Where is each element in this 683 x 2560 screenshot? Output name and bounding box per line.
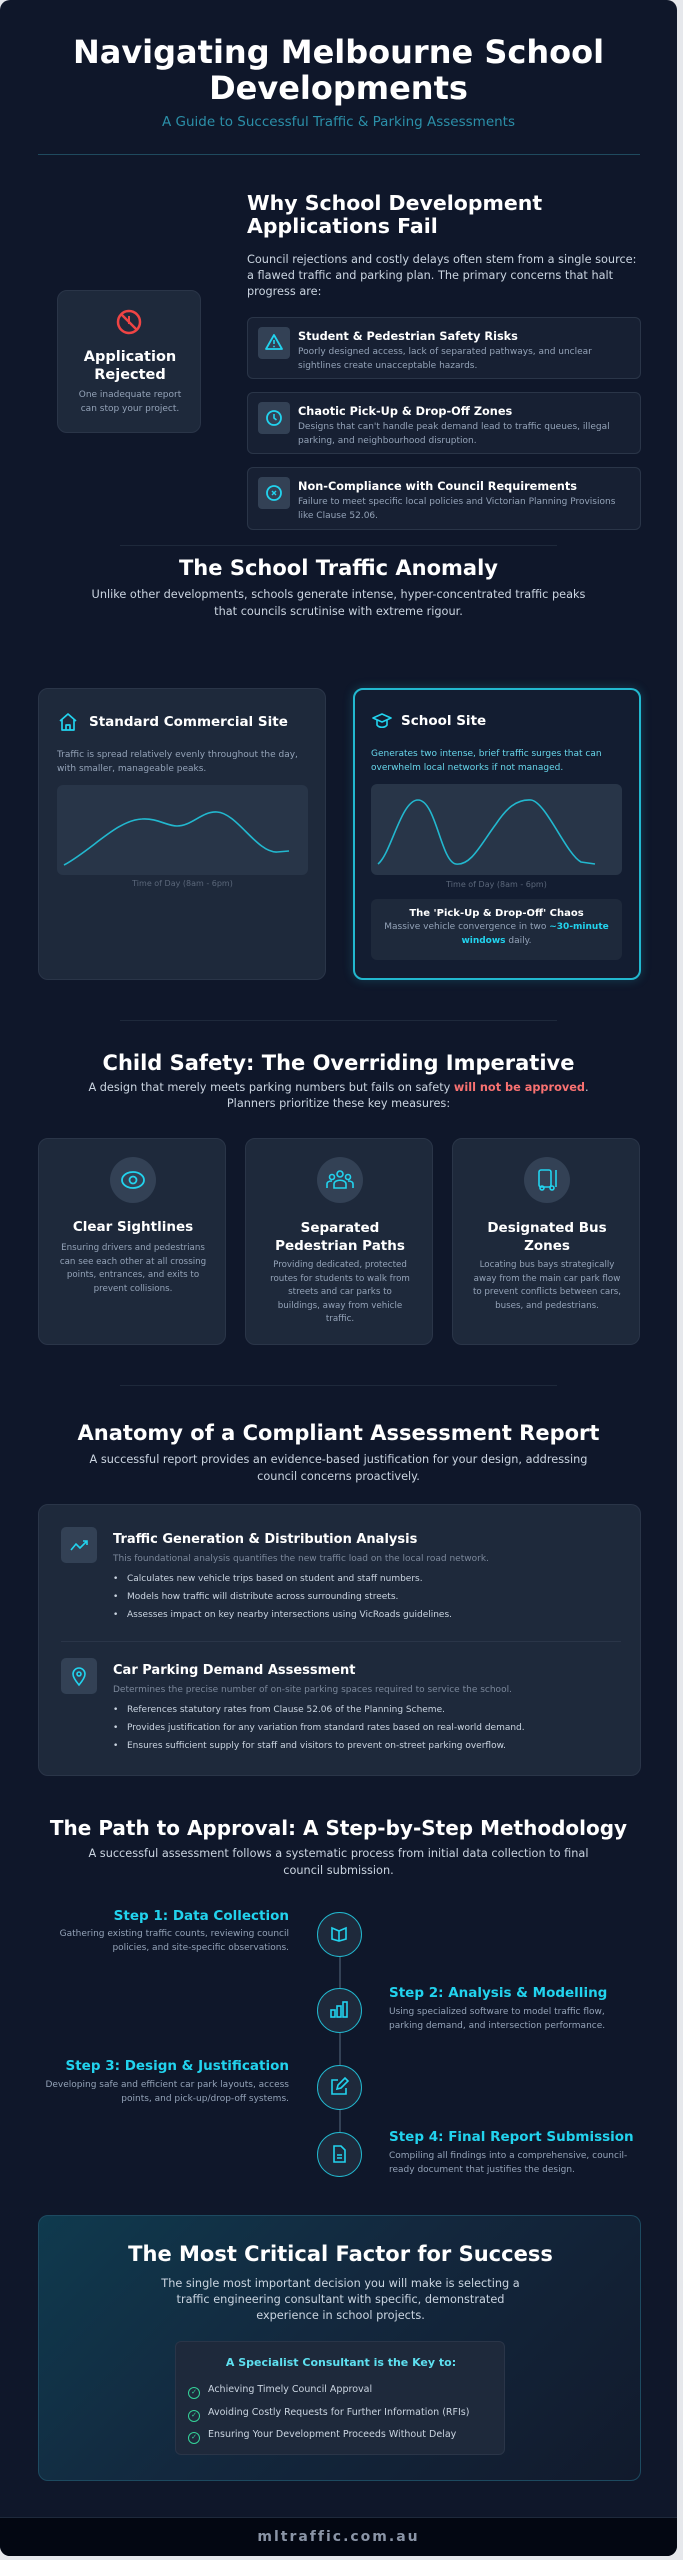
card: clear sightlines: Ensuring drivers and pedestrians can see each other at all crossing points, entrances, and exits to prevent collisions. xyxy=(60,1243,206,1294)
text: anomaly intro: Unlike other developments, schools generate intense, hyper-concentrated traffic peaks that councils scrutinise with extreme rigour. xyxy=(92,588,585,618)
callout: specialist consultant: ✓ xyxy=(191,2433,197,2441)
item: parking demand: References statutory rates from Clause 52.06 of the Planning Scheme. xyxy=(127,1705,445,1715)
chart: even traffic xyxy=(57,785,308,875)
panel: application rejected: can stop your project. xyxy=(81,404,179,414)
item: traffic generation: Models how traffic will distribute across surrounding streets. xyxy=(127,1592,398,1602)
item: parking demand: Ensures sufficient supply for staff and visitors to prevent on-street parking overflow. xyxy=(127,1741,506,1751)
item: traffic generation: Calculates new vehicle trips based on student and staff numbers. xyxy=(127,1574,423,1584)
callout: specialist consultant: Ensuring Your Development Proceeds Without Delay xyxy=(208,2429,456,2440)
item: parking demand: Determines the precise number of on-site parking spaces required to service the school. xyxy=(113,1685,512,1695)
icon: prohibited xyxy=(116,310,142,334)
item: traffic generation: Traffic Generation & Distribution Analysis xyxy=(113,1532,417,1547)
panel: school site: Generates two intense, brief traffic surges that can overwhelm local networks if not managed. xyxy=(371,749,602,772)
chart: twin peaks xyxy=(371,784,622,875)
card: non-compliance xyxy=(247,467,641,530)
step 1: Gathering existing traffic counts, reviewing council policies, and site-specific observations. xyxy=(60,1929,289,1952)
title xyxy=(73,33,604,107)
card: pickup zones: Designs that can't handle peak demand lead to traffic queues, illegal parking, and neighbourhood disruption. xyxy=(298,422,610,446)
card: separated paths: Pedestrian Paths xyxy=(275,1238,405,1254)
card: bus zones: Designated Bus xyxy=(487,1220,607,1236)
text: safety intro: Planners prioritize these key measures: xyxy=(227,1097,450,1110)
footer xyxy=(0,2517,677,2556)
item: traffic generation: This foundational analysis quantifies the new traffic load on the local road network. xyxy=(113,1554,489,1564)
item: parking demand xyxy=(61,1658,525,1751)
step 2: Using specialized software to model traffic flow, parking demand, and intersection performance. xyxy=(389,2007,605,2030)
panel: school site: School Site xyxy=(401,713,486,729)
callout: pick-up chaos: The 'Pick-Up & Drop-Off' Chaos xyxy=(409,908,584,919)
icon: map pin xyxy=(61,1658,97,1694)
card: bus zones: Zones xyxy=(524,1238,570,1254)
card: safety risks: Poorly designed access, lack of separated pathways, and unclear sightlines create unacceptable hazards. xyxy=(298,347,592,370)
item: parking demand: Provides justification for any variation from standard rates based on real-world demand. xyxy=(127,1723,525,1733)
heading: why fail: Why School Development xyxy=(247,191,542,215)
icon: eye xyxy=(110,1157,156,1203)
card: separated paths: Providing dedicated, protected routes for students to walk from streets and car parks to buildings, away from vehicle traffic. xyxy=(270,1260,410,1324)
panel: critical factor: The single most important decision you will make is selecting a traffic engineering consultant with specific, demonstrated experience in school projects. xyxy=(161,2277,520,2322)
card: safety risks xyxy=(247,317,641,379)
icon: clock xyxy=(258,402,290,434)
step 4 xyxy=(317,2129,634,2177)
heading: child safety: Child Safety: The Overriding Imperative xyxy=(103,1051,574,1075)
card: bus zones xyxy=(452,1138,640,1345)
panel: report components xyxy=(38,1504,641,1776)
step 3 xyxy=(45,2058,362,2110)
panel: application rejected: Application xyxy=(84,349,176,365)
card: bus zones: Locating bus bays strategically away from the main car park flow to prevent conflicts between cars, buses, and pedestrians. xyxy=(473,1260,621,1310)
card: separated paths xyxy=(245,1138,433,1345)
callout: specialist consultant xyxy=(175,2341,505,2455)
panel: application rejected: Rejected xyxy=(94,367,166,383)
panel: standard commercial: Traffic is spread relatively evenly throughout the day, with smaller, manageable peaks. xyxy=(57,750,298,774)
icon: trend xyxy=(61,1527,97,1563)
heading: why fail: Applications Fail xyxy=(247,214,438,238)
step 1: Step 1: Data Collection xyxy=(114,1908,289,1924)
icon: bar chart xyxy=(317,1988,362,2033)
text: intro: Council rejections and costly delays often stem from a single source: a flawed traffic and parking plan. The primary concerns that halt progress are: xyxy=(247,253,636,298)
heading: traffic anomaly: The School Traffic Anomaly xyxy=(179,556,498,580)
item: parking demand: Car Parking Demand Assessment xyxy=(113,1663,355,1678)
card: clear sightlines xyxy=(38,1138,226,1345)
icon: x circle xyxy=(258,477,290,509)
callout: specialist consultant: A Specialist Consultant is the Key to: xyxy=(226,2356,456,2369)
footer: mltraffic.com.au xyxy=(257,2529,420,2545)
icon: warning xyxy=(258,327,290,359)
icon: book xyxy=(317,1912,362,1957)
text: safety intro: A design that merely meets parking numbers but fails on safety will not be approved. xyxy=(88,1081,589,1094)
card: non-compliance: Failure to meet specific local policies and Victorian Planning Provisions like Clause 52.06. xyxy=(298,497,615,520)
step 1 xyxy=(60,1908,362,1957)
icon: house xyxy=(60,713,76,731)
panel: standard commercial: Standard Commercial Site xyxy=(89,714,288,730)
icon: bus xyxy=(524,1157,570,1203)
timeline xyxy=(45,1908,634,2177)
callout: specialist consultant: Achieving Timely Council Approval xyxy=(208,2384,372,2395)
panel: critical factor xyxy=(38,2215,641,2481)
card: clear sightlines: Clear Sightlines xyxy=(73,1219,193,1235)
icon: people xyxy=(317,1157,363,1203)
panel: standard commercial xyxy=(38,688,326,980)
icon: document xyxy=(317,2132,362,2177)
heading: path to approval: The Path to Approval: A Step-by-Step Methodology xyxy=(50,1816,627,1840)
panel: application rejected xyxy=(57,290,201,433)
callout: specialist consultant: ✓ xyxy=(191,2388,197,2396)
text: path intro: A successful assessment follows a systematic process from initial data collection to final council submission. xyxy=(88,1847,588,1877)
panel: application rejected: One inadequate report xyxy=(79,390,181,400)
icon: edit xyxy=(317,2065,362,2110)
callout: pick-up chaos: windows daily. xyxy=(461,936,532,946)
panel: school site xyxy=(353,688,641,980)
card: safety risks: Student & Pedestrian Safety Risks xyxy=(298,330,518,343)
callout: specialist consultant: Avoiding Costly Requests for Further Information (RFIs) xyxy=(208,2406,469,2418)
card: non-compliance: Non-Compliance with Council Requirements xyxy=(298,480,577,493)
heading: anatomy: Anatomy of a Compliant Assessment Report xyxy=(78,1421,599,1445)
step 4: Step 4: Final Report Submission xyxy=(389,2129,634,2145)
item: traffic generation xyxy=(61,1527,489,1620)
icon: graduation cap xyxy=(372,713,392,728)
heading: why fail xyxy=(247,191,542,238)
panel: school site: Time of Day (8am - 6pm) xyxy=(446,880,547,889)
step 3: Step 3: Design & Justification xyxy=(66,2058,289,2074)
title: Developments xyxy=(209,69,468,107)
title: Navigating Melbourne School xyxy=(73,33,604,71)
step 4: Compiling all findings into a comprehensive, council-ready document that justifies the design. xyxy=(389,2151,627,2174)
panel: critical factor: The Most Critical Factor for Success xyxy=(128,2242,553,2266)
text: anatomy intro: A successful report provides an evidence-based justification for your design, addressing council concerns proactively. xyxy=(90,1453,587,1483)
card: pickup zones xyxy=(247,392,641,454)
card: pickup zones: Chaotic Pick-Up & Drop-Off Zones xyxy=(298,405,512,418)
item: traffic generation: Assesses impact on key nearby intersections using VicRoads guidelines. xyxy=(127,1610,452,1620)
text: safety intro xyxy=(88,1081,589,1110)
step 3: Developing safe and efficient car park layouts, access points, and pick-up/drop-off systems. xyxy=(45,2080,289,2104)
callout: pick-up chaos: Massive vehicle convergence in two ~30-minute xyxy=(384,922,609,932)
callout: specialist consultant: ✓ xyxy=(191,2410,197,2418)
panel: standard commercial: Time of Day (8am - 6pm) xyxy=(132,879,233,888)
step 2: Step 2: Analysis & Modelling xyxy=(389,1985,607,2001)
subtitle: A Guide to Successful Traffic & Parking Assessments xyxy=(162,114,515,130)
step 2 xyxy=(317,1985,607,2033)
card: separated paths: Separated xyxy=(301,1220,379,1236)
callout: pick-up chaos xyxy=(371,899,622,960)
